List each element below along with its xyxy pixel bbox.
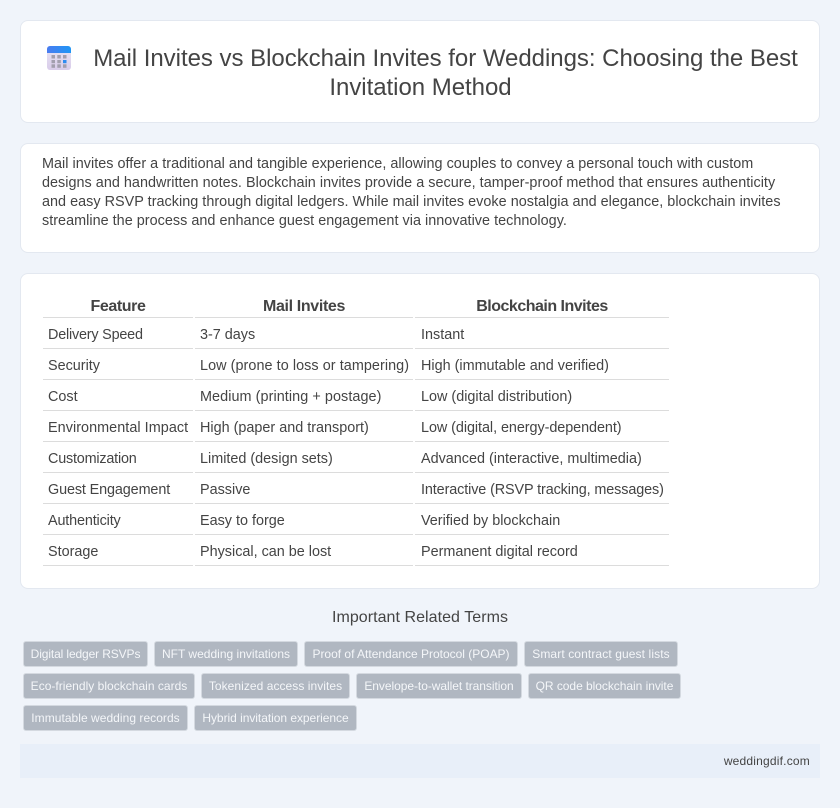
panel: intro paragraph	[20, 143, 820, 253]
row: cost: Low (digital distribution)	[421, 389, 572, 405]
row: authenticity: Easy to forge	[200, 513, 285, 529]
chip	[304, 641, 518, 667]
row: security: Low (prone to loss or tampering)	[200, 358, 409, 374]
chip	[23, 705, 188, 731]
chip: Smart contract guest lists	[532, 647, 670, 661]
panel: header	[20, 20, 820, 123]
footer	[20, 744, 820, 778]
row: storage	[48, 544, 578, 560]
heading: important related terms: Important Related Terms	[332, 609, 508, 626]
chip: NFT wedding invitations	[162, 647, 290, 661]
row: security: High (immutable and verified)	[421, 358, 609, 374]
title: Invitation Method	[329, 74, 512, 101]
row: customization: Limited (design sets)	[200, 451, 333, 467]
row: customization	[48, 451, 642, 467]
row: authenticity: Verified by blockchain	[421, 513, 560, 529]
row: storage: Permanent digital record	[421, 544, 578, 560]
row: guest engagement: Guest Engagement	[48, 482, 170, 498]
table header: Feature	[90, 298, 146, 315]
chip	[201, 673, 350, 699]
intro text: designs and handwritten notes. Blockchain invites provide a secure, tamper-proof method that ensures authenticity	[42, 175, 775, 191]
row: delivery speed: 3-7 days	[200, 327, 255, 343]
row: cost: Medium (printing + postage)	[200, 389, 381, 405]
row: guest engagement: Passive	[200, 482, 250, 498]
intro text: Mail invites offer a traditional and tangible experience, allowing couples to convey a personal touch with custom	[42, 156, 753, 172]
row: security: Security	[48, 358, 100, 374]
row: storage: Storage	[48, 544, 98, 560]
row: guest engagement: Interactive (RSVP tracking, messages)	[421, 482, 664, 498]
chip	[524, 641, 678, 667]
chip	[356, 673, 522, 699]
row: cost: Cost	[48, 389, 78, 405]
row: environmental impact: Environmental Impact	[48, 420, 188, 436]
intro text: and easy RSVP tracking through digital ledgers. While mail invites evoke nostalgia and elegance, blockchain invites	[42, 194, 781, 210]
chip: QR code blockchain invite	[536, 679, 673, 693]
table header: Mail Invites	[263, 298, 345, 315]
table header	[90, 298, 608, 315]
chip: Digital ledger RSVPs	[31, 647, 140, 661]
title: Mail Invites vs Blockchain Invites for Weddings: Choosing the Best	[93, 45, 798, 72]
chip: Immutable wedding records	[31, 711, 180, 725]
chip	[194, 705, 357, 731]
row: delivery speed: Instant	[421, 327, 464, 343]
intro text	[42, 156, 781, 229]
chip: Tokenized access invites	[209, 679, 342, 693]
chip: Envelope-to-wallet transition	[364, 679, 514, 693]
row: security	[48, 358, 609, 374]
chip	[23, 673, 195, 699]
chip: Eco-friendly blockchain cards	[31, 679, 187, 693]
chip: Proof of Attendance Protocol (POAP)	[312, 647, 510, 661]
footer source text: weddingdif.com	[724, 754, 810, 768]
row: environmental impact: High (paper and transport)	[200, 420, 369, 436]
icon: calendar	[47, 46, 71, 70]
row: guest engagement	[48, 482, 664, 498]
row: storage: Physical, can be lost	[200, 544, 331, 560]
chip	[528, 673, 681, 699]
row: customization: Customization	[48, 451, 137, 467]
row: authenticity: Authenticity	[48, 513, 121, 529]
comparison table	[43, 298, 669, 566]
row: environmental impact: Low (digital, energy-dependent)	[421, 420, 622, 436]
title	[93, 45, 798, 101]
table header: Blockchain Invites	[476, 298, 608, 315]
chip	[154, 641, 298, 667]
panel: comparison table	[20, 273, 820, 589]
chip	[23, 641, 148, 667]
row: environmental impact	[48, 420, 622, 436]
term chips	[23, 641, 681, 731]
row: delivery speed: Delivery Speed	[48, 327, 143, 343]
row: cost	[48, 389, 572, 405]
row: delivery speed	[48, 327, 464, 343]
chip: Hybrid invitation experience	[202, 711, 349, 725]
row: customization: Advanced (interactive, multimedia)	[421, 451, 642, 467]
intro text: streamline the process and enhance guest engagement via innovative technology.	[42, 213, 567, 229]
row: authenticity	[48, 513, 560, 529]
